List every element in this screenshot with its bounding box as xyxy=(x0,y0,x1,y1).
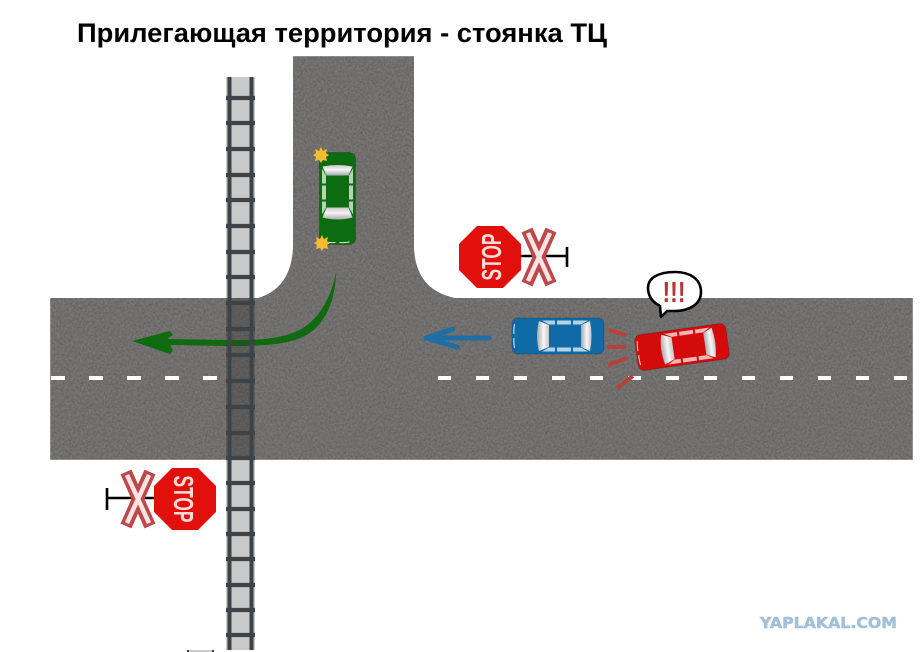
blue car xyxy=(512,318,604,354)
green turning arrow xyxy=(132,272,336,354)
icon: stop octagon upper xyxy=(459,226,521,288)
fragment at bottom edge xyxy=(187,650,214,652)
icon: stop octagon lower xyxy=(154,468,216,530)
road centre dashes: left section xyxy=(51,376,217,380)
speech bubble: !!! xyxy=(662,277,686,309)
stop text upper: STOP xyxy=(476,234,507,280)
road centre dashes: right section xyxy=(438,376,907,380)
stop sign and crossing sign, lower xyxy=(107,468,216,530)
blue arrow xyxy=(426,329,489,347)
railway track xyxy=(226,77,255,650)
stop sign and crossing sign, upper xyxy=(459,226,567,288)
icon: hazard light bottom xyxy=(314,235,330,251)
stop text lower: STOP xyxy=(168,476,199,522)
icon: St Andrew's cross lower xyxy=(126,472,150,526)
red impact lines xyxy=(607,330,633,388)
green car, parked, hood facing down xyxy=(320,152,356,244)
watermark: YAPLAKAL.COM xyxy=(759,614,897,632)
speech bubble xyxy=(648,272,701,317)
icon: St Andrew's cross upper xyxy=(527,230,551,284)
title: Прилегающая территория - стоянка ТЦ xyxy=(77,18,607,48)
road: T-junction asphalt xyxy=(50,56,913,460)
red car xyxy=(634,323,730,371)
icon: hazard light top xyxy=(313,147,329,163)
